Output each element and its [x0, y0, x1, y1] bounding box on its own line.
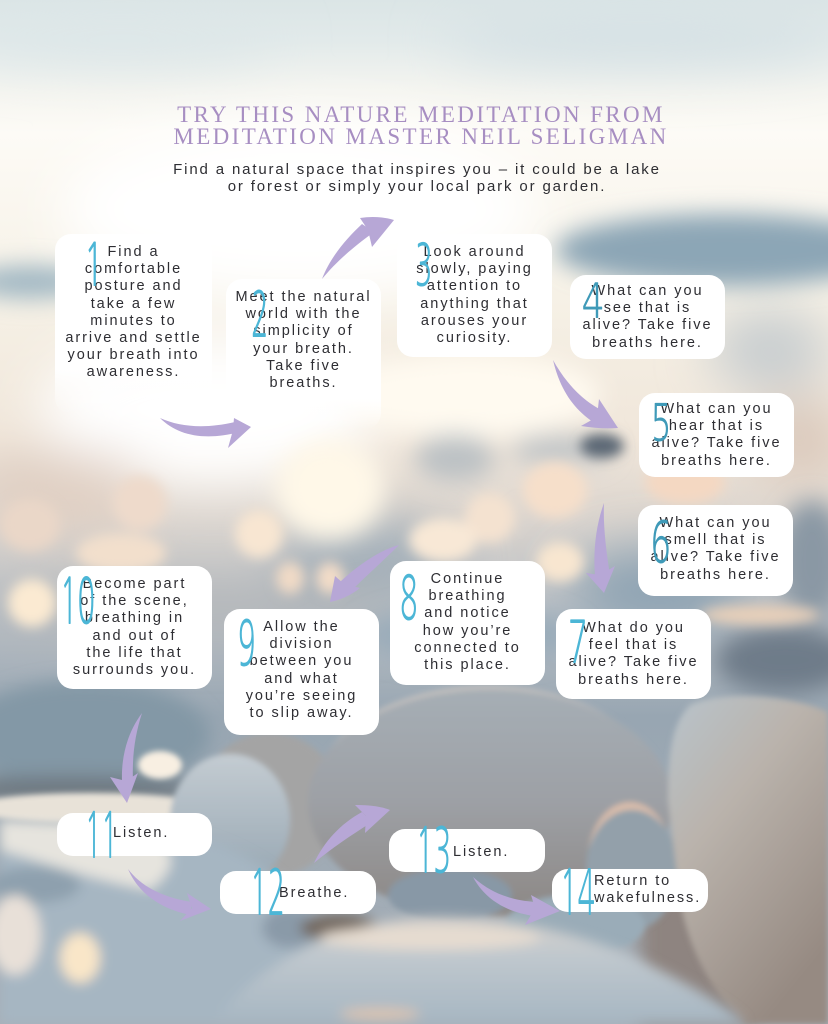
panel: step 9 [224, 609, 379, 735]
number 5: 5 [651, 398, 670, 449]
panel: step 1: arrive and settle [65, 330, 202, 346]
number 12: 12 [250, 862, 285, 925]
panel: step 8: breathing [428, 588, 506, 604]
panel: step 1: Find a [108, 244, 160, 260]
panel: step 7: breaths here. [578, 672, 689, 688]
arrow: step 5 to 7 [586, 503, 615, 593]
panel: step 1: minutes to [90, 313, 177, 329]
number 1: 1 [84, 235, 103, 295]
panel: step 3: anything that [420, 296, 529, 312]
panel: step 4: breaths here. [592, 335, 703, 351]
number 13: 13 [416, 820, 451, 883]
panel: step 10: and out of [92, 628, 176, 644]
panel: step 4: What can you [591, 283, 704, 299]
number 8: 8 [400, 568, 417, 629]
panel: step 14 [552, 869, 708, 912]
panel: step 1: comfortable [85, 261, 182, 277]
panel: step 10 [57, 566, 212, 689]
panel: step 10: Become part [83, 576, 186, 592]
panel: step 13 [389, 829, 545, 872]
panel: step 1: awareness. [87, 364, 180, 380]
panel: step 2 [226, 279, 381, 429]
panel: step 4: alive? Take five [582, 317, 713, 333]
panel: step 6: smell that is [665, 532, 766, 548]
arrow: step 10 to 11 [110, 713, 142, 803]
number 11: 11 [85, 805, 118, 867]
panel: step 2: breaths. [270, 375, 338, 391]
panel: step 3: attention to [427, 278, 522, 294]
panel: step 10: breathing in [85, 610, 184, 626]
panel: step 6: What can you [659, 515, 772, 531]
intro text: or forest or simply your local park or garden. [228, 178, 606, 195]
panel: step 3: Look around [423, 244, 526, 260]
panel: step 10: the life that [86, 645, 183, 661]
panel: step 7: feel that is [589, 637, 678, 653]
panel: step 3 [397, 234, 552, 357]
panel: step 8: how you’re [423, 623, 512, 639]
panel: step 2: simplicity of [253, 323, 354, 339]
panel: step 1: take a few [91, 296, 176, 312]
arrow: step 11 to 12 [128, 869, 211, 921]
number 2: 2 [251, 284, 268, 347]
panel: step 11: Listen. [113, 825, 169, 841]
panel: step 9: Allow the [263, 619, 340, 635]
panel: step 4: see that is [604, 300, 691, 316]
pebbles [0, 680, 760, 1024]
panel: step 1: your breath into [68, 347, 199, 363]
arrow: step 8 to 9 [330, 545, 399, 602]
arrow: step 1 to 2 [160, 418, 251, 448]
arrow: step 12 to 13 [314, 805, 390, 863]
panel: step 2: world with the [246, 306, 361, 322]
panel: step 3: arouses your [421, 313, 528, 329]
panel: step 2: Meet the natural [236, 289, 372, 305]
panel: step 7: alive? Take five [568, 654, 699, 670]
panel: step 14: wakefulness. [594, 890, 701, 906]
panel: step 7 [556, 609, 711, 699]
number 6: 6 [651, 514, 670, 572]
panel: step 13: Listen. [453, 844, 509, 860]
title [173, 102, 669, 148]
panel: step 5: What can you [660, 401, 773, 417]
panel: step 10: surrounds you. [73, 662, 196, 678]
panel: step 8 [390, 561, 545, 685]
panel: step 8: connected to [414, 640, 521, 656]
arrow: step 3 to 5 [553, 360, 618, 428]
panel: step 6 [638, 505, 793, 596]
intro text: Find a natural space that inspires you – it could be a lake [173, 161, 661, 178]
panel: step 6: alive? Take five [650, 549, 781, 565]
panel: step 8: this place. [424, 657, 511, 673]
panel: step 6: breaths here. [660, 567, 771, 583]
panel: step 5: breaths here. [661, 453, 772, 469]
panel: step 2: your breath. [253, 341, 354, 357]
panel: step 1 [55, 234, 212, 414]
arrow: step 2 to 3 [322, 217, 394, 279]
panel: step 11 [57, 813, 212, 856]
panel: step 9: to slip away. [249, 705, 354, 721]
panel: step 9: you’re seeing [246, 688, 357, 704]
panel: step 2: Take five [266, 358, 341, 374]
panel: step 12 [220, 871, 376, 914]
panel: step 9: and what [264, 671, 339, 687]
panel: step 1: posture and [84, 278, 183, 294]
number 4: 4 [582, 278, 603, 326]
panel: step 9: division [270, 636, 333, 652]
arrow: step 13 to 14 [473, 877, 560, 925]
panel: step 5: hear that is [669, 418, 764, 434]
intro text [173, 161, 661, 195]
number 10: 10 [60, 571, 95, 634]
title: MEDITATION MASTER NEIL SELIGMAN [173, 124, 669, 148]
panel: step 5: alive? Take five [651, 435, 782, 451]
number 14: 14 [560, 862, 595, 925]
panel: step 8: and notice [424, 605, 511, 621]
panel: step 10: of the scene, [80, 593, 189, 609]
panel: step 9: between you [250, 653, 353, 669]
number 3: 3 [415, 235, 432, 295]
panel: step 3: slowly, paying [416, 261, 533, 277]
panel: step 12: Breathe. [279, 885, 349, 901]
panel: step 5 [639, 393, 794, 477]
title: TRY THIS NATURE MEDITATION FROM [177, 102, 665, 127]
number 7: 7 [568, 612, 587, 672]
panel: step 14: Return to [594, 873, 671, 889]
panel: step 8: Continue [431, 571, 504, 587]
panel: step 4 [570, 275, 725, 359]
panel: step 3: curiosity. [437, 330, 512, 346]
number 9: 9 [238, 613, 255, 676]
panel: step 7: What do you [582, 620, 685, 636]
